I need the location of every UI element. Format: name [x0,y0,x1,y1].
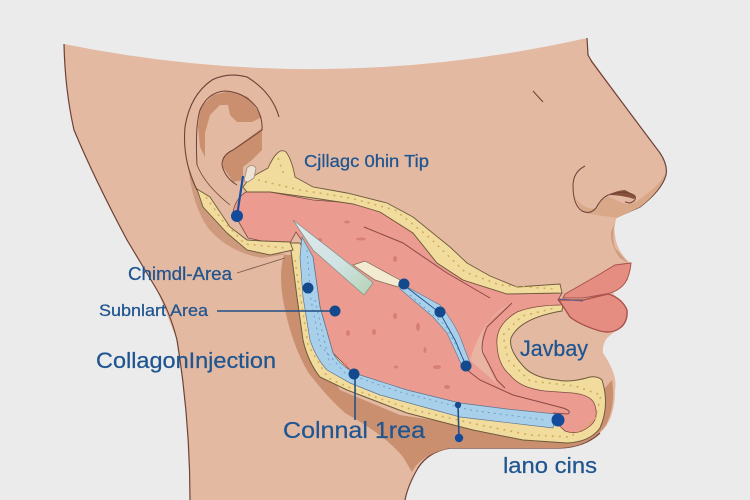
lower leader line [354,374,356,420]
ear shadow [188,165,287,258]
speckles in blue layer [307,250,545,420]
small leader line [458,405,459,438]
yellow band beneath ear [197,189,293,255]
chimdl leader line [237,258,285,273]
label: lano cins: lano cins [503,453,597,478]
deep muscle lines [364,227,569,414]
ear inner helix [196,91,262,185]
injection points [217,258,564,442]
muscle tissue pink [233,190,596,433]
label: Cjllagc 0hin Tip: Cjllagc 0hin Tip [304,151,429,171]
lower yellow fat layer [290,243,606,443]
label: CollagonInjection: CollagonInjection [96,348,276,373]
needle blade [293,220,373,295]
label: Colnnal area: Colnnal 1rea [283,417,425,443]
nose shadow [574,172,666,218]
label: Chimdl-Area: Chimdl-Area [128,264,233,284]
nose bridge crease [533,91,543,102]
speckles in fat layers [206,158,601,437]
deep vessel line in strip [405,286,466,366]
upper yellow fat layer [243,151,562,294]
subnlart leader line [217,310,335,312]
lighter wedge between muscle layers [470,303,510,384]
ear device [244,166,256,182]
philtrum shadow [611,220,628,263]
skin outline [64,38,666,500]
nostril [608,190,636,199]
lower lip [559,294,627,332]
needle plunger [353,261,400,287]
ear lobe line [197,165,230,205]
ear [184,75,279,205]
lip parting line [559,299,583,301]
face and neck skin [64,38,666,500]
ear lower bowl [223,128,262,182]
blue collagen strip under needle [400,283,470,368]
neck shadow [281,255,613,472]
ear concha shading [198,91,262,157]
label: Javbay: Javbay [520,336,588,361]
upper lip [563,263,631,298]
pink tissue spots [318,220,450,389]
label: Subnlart Area: Subnlart Area [99,301,209,320]
blue collagen layer along jaw [300,237,556,428]
nose wing outline [573,166,635,212]
ear injection pointer [231,176,243,222]
ear outer helix [184,75,279,190]
